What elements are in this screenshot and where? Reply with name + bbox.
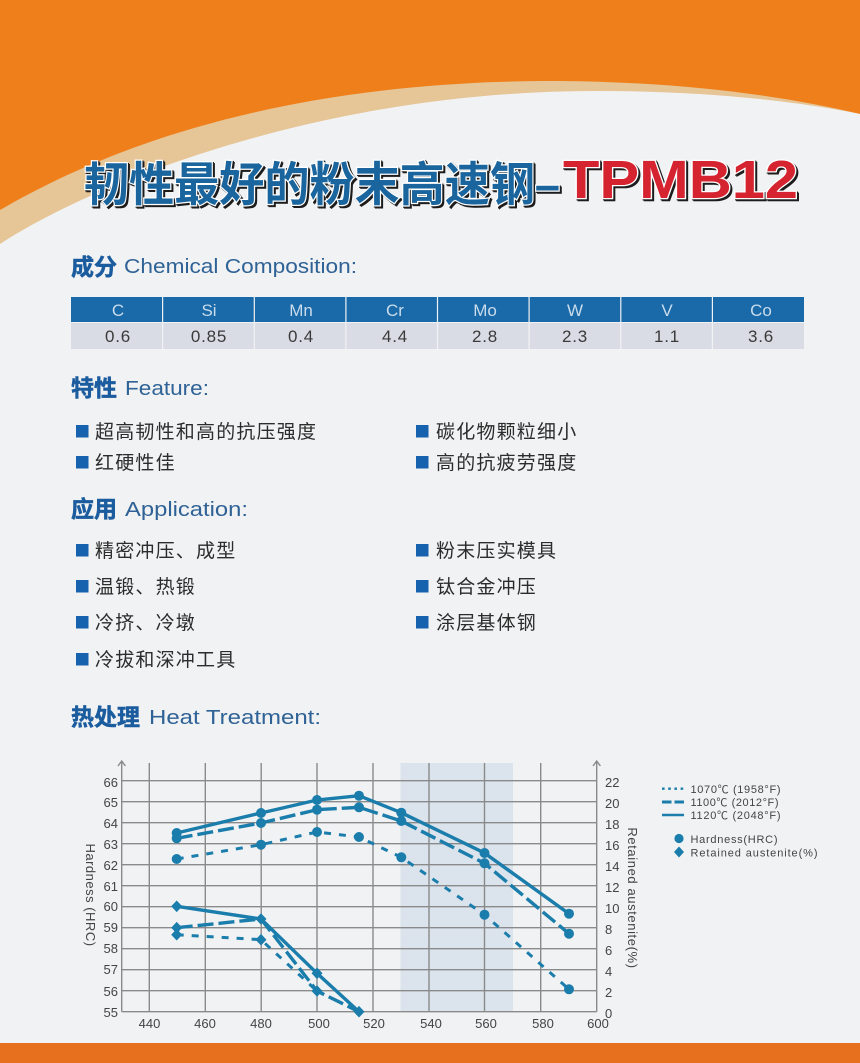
- heading: heat treatment: Heat Treatment:: [149, 707, 321, 729]
- heading: chemical composition: 成分: [71, 254, 117, 280]
- table: chemical composition: 2.3: [562, 327, 588, 346]
- left axis labels: 60: [104, 899, 118, 914]
- chart legend: 1100℃ (2012°F): [690, 797, 778, 809]
- left axis labels: [104, 775, 118, 1020]
- heading: heat treatment: 热处理: [71, 704, 140, 730]
- chart legend: 1070℃ (1958°F): [690, 784, 780, 796]
- left axis labels: 55: [104, 1005, 118, 1020]
- table: chemical composition: Mn: [289, 301, 313, 320]
- right axis labels: 8: [605, 922, 612, 937]
- feature list: 超高韧性和高的抗压强度: [95, 421, 317, 443]
- right axis labels: 18: [605, 817, 619, 832]
- feature list: [76, 421, 577, 474]
- shaded temperature range: [400, 763, 513, 1012]
- left axis labels: 58: [104, 941, 118, 956]
- table: chemical composition: 1.1: [654, 327, 680, 346]
- chart legend: Retained austenite(%): [690, 848, 818, 860]
- table: chemical composition: 0.6: [105, 327, 131, 346]
- x axis labels: 460: [194, 1016, 216, 1031]
- feature list: 红硬性佳: [95, 452, 176, 474]
- right axis labels: 20: [605, 796, 619, 811]
- hardness markers: [172, 791, 574, 994]
- table: chemical composition: W: [567, 301, 583, 320]
- x axis labels: 540: [420, 1016, 442, 1031]
- application list: 冷拔和深冲工具: [95, 649, 236, 671]
- left axis title: Hardness (HRC): [83, 843, 98, 947]
- left axis labels: 63: [104, 837, 118, 852]
- application list: 粉末压实模具: [436, 540, 557, 562]
- right axis labels: 16: [605, 838, 619, 853]
- application list: 涂层基体钢: [436, 612, 537, 634]
- heading: application: Application:: [125, 499, 248, 521]
- right axis labels: 22: [605, 775, 619, 790]
- feature list: 碳化物颗粒细小: [436, 421, 577, 443]
- heading: feature: [71, 375, 209, 401]
- chart legend: 1120℃ (2048°F): [690, 810, 780, 822]
- right axis labels: [605, 775, 619, 1021]
- x axis labels: 480: [250, 1016, 272, 1031]
- table: chemical composition: V: [661, 301, 673, 320]
- left axis labels: 62: [104, 858, 118, 873]
- x axis labels: 600: [587, 1016, 609, 1031]
- chart legend: Hardness(HRC): [690, 834, 778, 846]
- title: 韧性最好的粉末高速钢–: [84, 158, 560, 211]
- application list: 精密冲压、成型: [95, 540, 236, 562]
- left axis labels: 65: [104, 795, 118, 810]
- right axis labels: 6: [605, 943, 612, 958]
- x axis labels: 580: [532, 1016, 554, 1031]
- chart: hardness and retained austenite vs temperature: [83, 761, 640, 1031]
- right axis labels: 10: [605, 901, 619, 916]
- retained austenite curves: [177, 906, 359, 1012]
- x axis labels: 560: [475, 1016, 497, 1031]
- heading: feature: 特性: [71, 375, 117, 401]
- left axis labels: 59: [104, 920, 118, 935]
- table: chemical composition: Si: [201, 301, 217, 320]
- application list: [76, 540, 557, 671]
- heading: feature: Feature:: [125, 378, 209, 400]
- heading: application: 应用: [71, 496, 117, 522]
- title: [84, 150, 798, 211]
- heading: heat treatment: [71, 704, 321, 730]
- feature list: 高的抗疲劳强度: [436, 452, 577, 474]
- table: chemical composition: C: [112, 301, 124, 320]
- title: TPMB12: [563, 150, 798, 210]
- table: chemical composition: 3.6: [748, 327, 774, 346]
- left axis labels: 56: [104, 984, 118, 999]
- left axis labels: 61: [104, 879, 118, 894]
- table: chemical composition: Co: [750, 301, 772, 320]
- x axis labels: 500: [308, 1016, 330, 1031]
- table: chemical composition: 0.85: [191, 327, 227, 346]
- retained austenite markers: [171, 900, 364, 1018]
- right axis labels: 2: [605, 985, 612, 1000]
- right axis labels: 12: [605, 880, 619, 895]
- right axis labels: 0: [605, 1006, 612, 1021]
- right axis labels: 14: [605, 859, 619, 874]
- chart legend: [662, 784, 818, 860]
- heading: application: [71, 496, 248, 522]
- left axis labels: 57: [104, 962, 118, 977]
- left axis labels: 64: [104, 816, 118, 831]
- hardness curves: [177, 796, 569, 989]
- heading: chemical composition: [71, 254, 357, 280]
- left axis labels: 66: [104, 775, 118, 790]
- table: chemical composition: [71, 297, 804, 349]
- right axis title: Retained austenite(%): [625, 827, 640, 969]
- application list: 温锻、热锻: [95, 576, 196, 598]
- table: chemical composition: 4.4: [382, 327, 408, 346]
- right axis labels: 4: [605, 964, 612, 979]
- heading: chemical composition: Chemical Composition:: [124, 256, 357, 278]
- x axis labels: 440: [139, 1016, 160, 1031]
- table: chemical composition: Cr: [386, 301, 404, 320]
- x axis labels: 520: [363, 1016, 385, 1031]
- table: chemical composition: 2.8: [472, 327, 498, 346]
- table: chemical composition: Mo: [473, 301, 497, 320]
- application list: 钛合金冲压: [436, 576, 537, 598]
- table: chemical composition: 0.4: [288, 327, 314, 346]
- x axis labels: [139, 1016, 609, 1031]
- application list: 冷挤、冷墩: [95, 612, 196, 634]
